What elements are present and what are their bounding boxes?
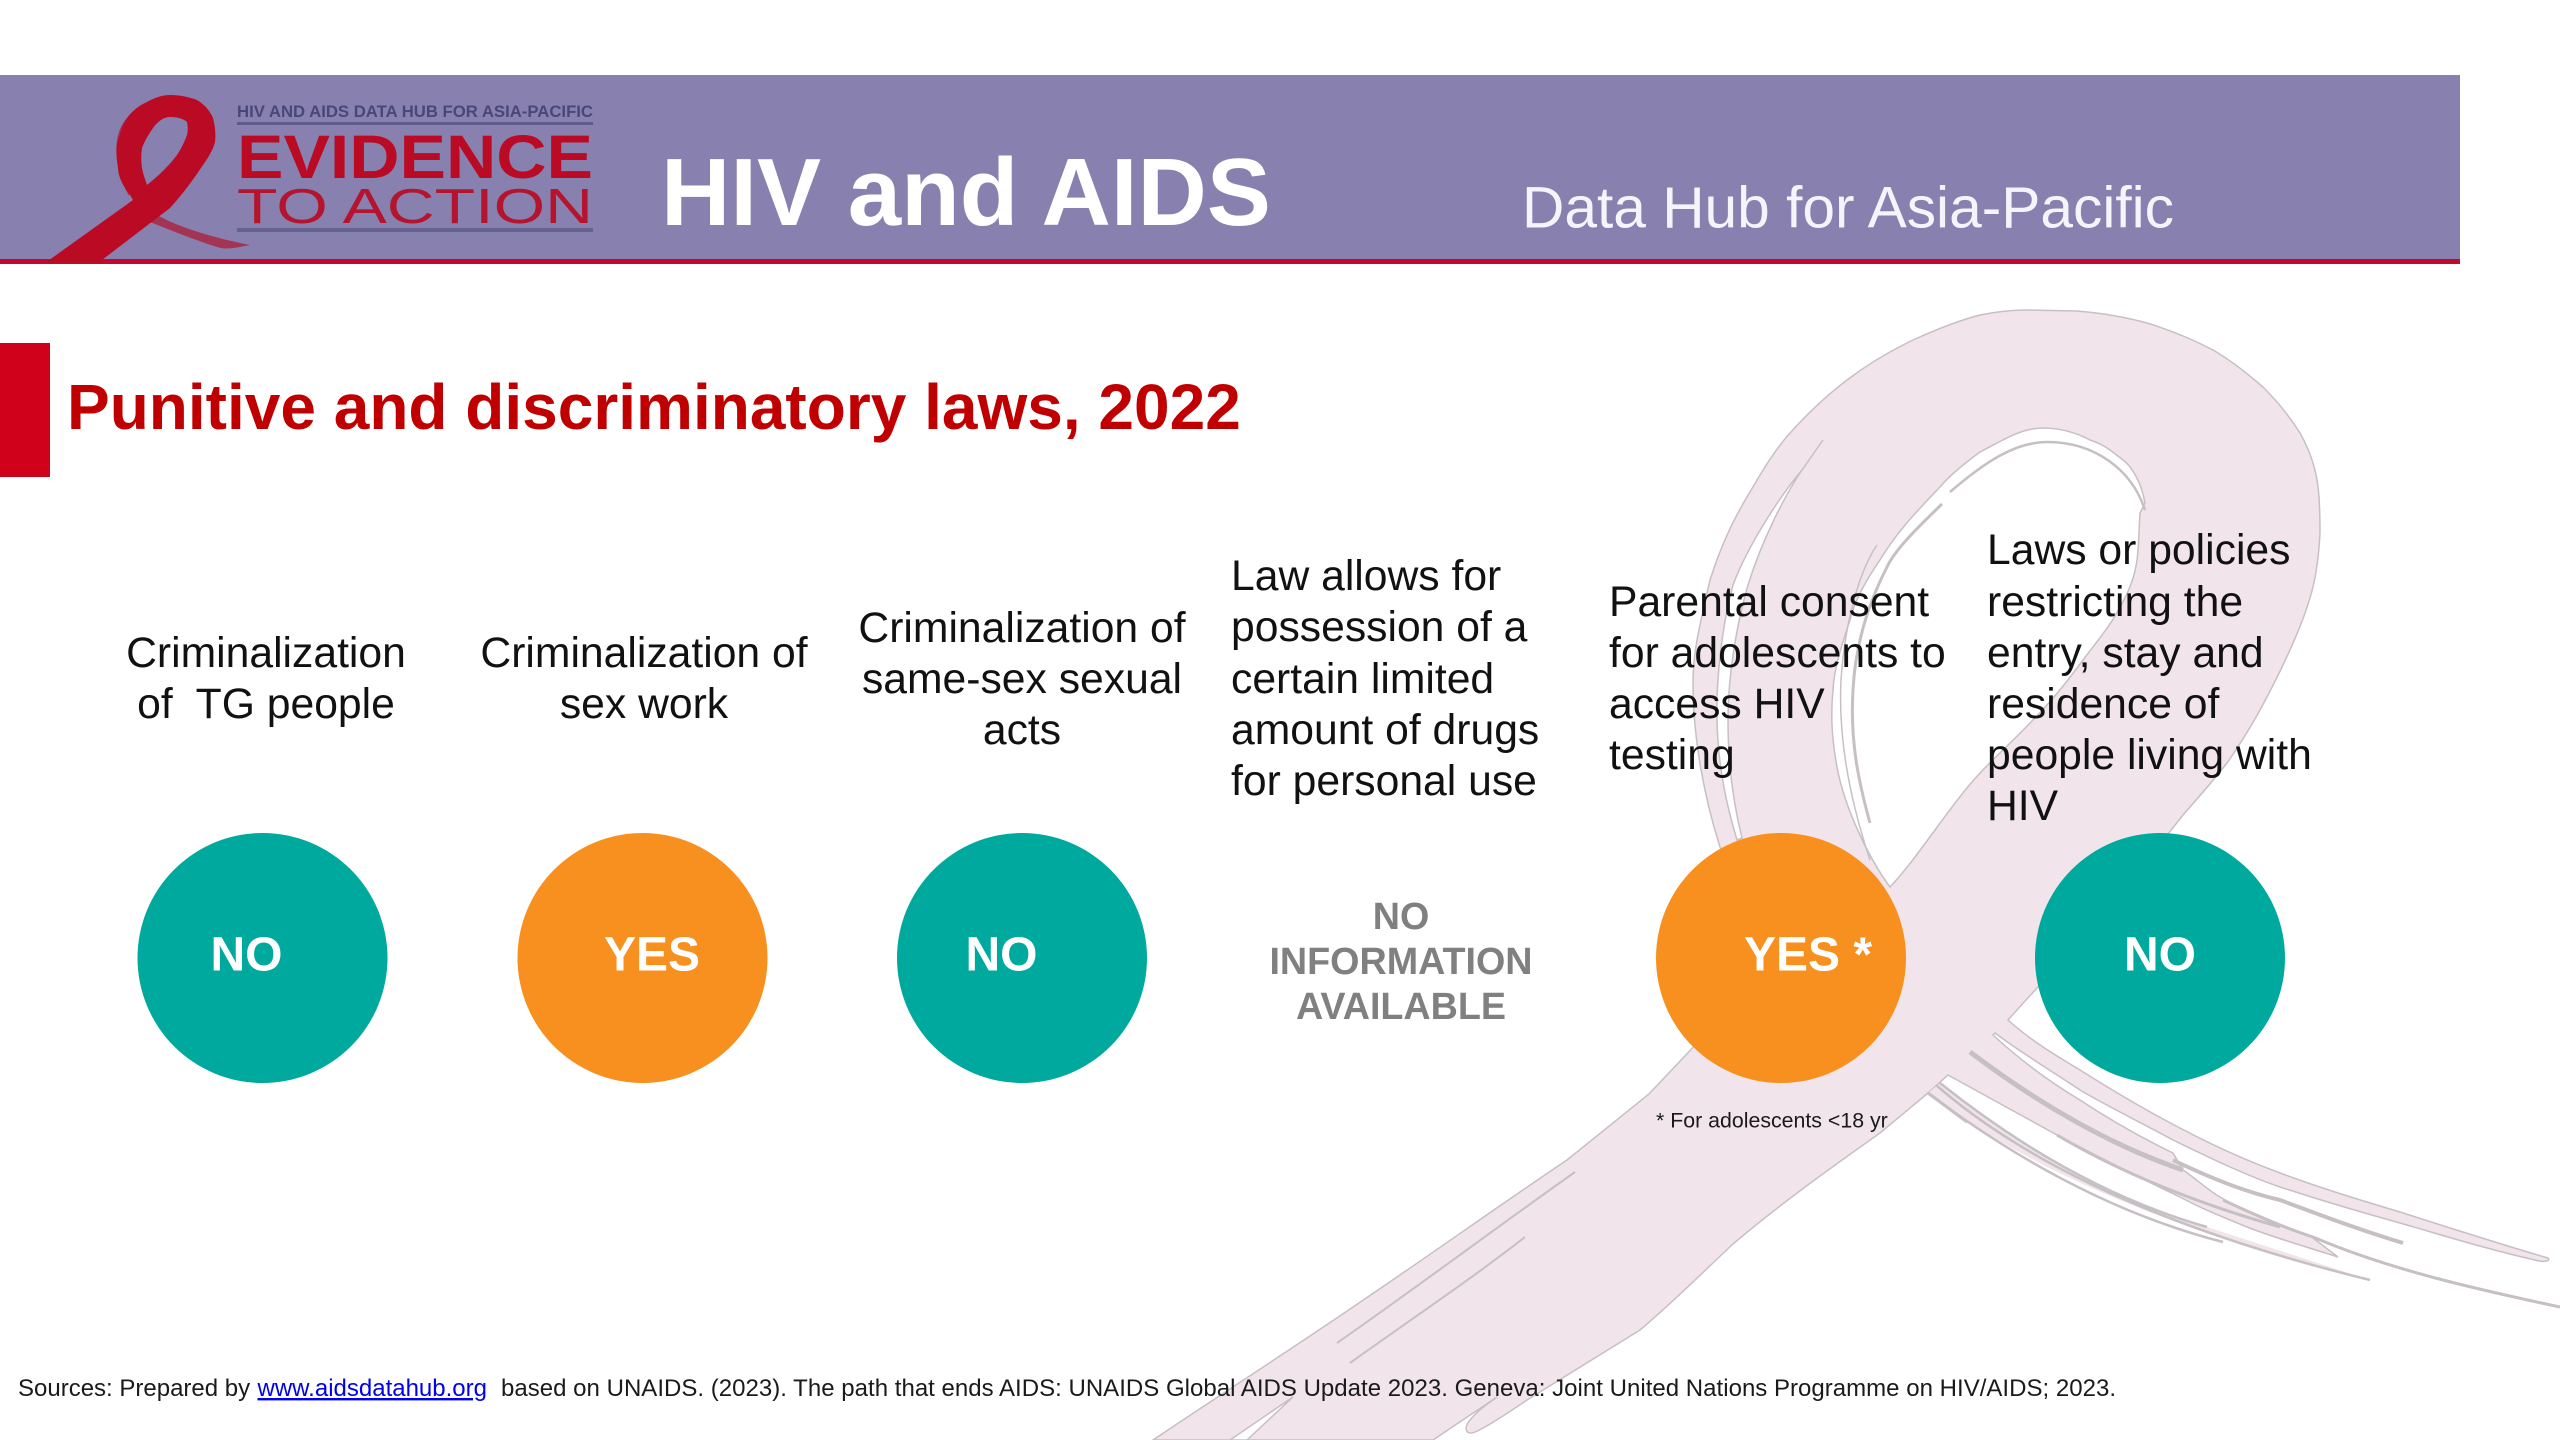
answer: no information available: INFORMATION [1269, 940, 1533, 982]
question text: certain limited [1231, 655, 1494, 703]
answer circle [138, 833, 388, 1083]
answer label: YES * [1744, 928, 1872, 982]
logo: Evidence to Action: TO ACTION [237, 180, 593, 234]
column 3: Criminalization of same-sex sexual acts [858, 604, 1186, 1083]
question text: access HIV [1609, 680, 1825, 728]
question text: Criminalization [126, 629, 406, 677]
answer circle [897, 833, 1147, 1083]
question text: sex work [560, 680, 729, 728]
question text: Criminalization of [480, 629, 808, 677]
answer label: NO [210, 928, 282, 982]
question text: residence of [1987, 680, 2220, 728]
question text: Laws or policies [1987, 526, 2290, 574]
logo: Evidence to Action: EVIDENCE [237, 123, 593, 191]
question text: restricting the [1987, 578, 2243, 626]
header banner [0, 75, 2460, 264]
question text: same-sex sexual [862, 655, 1182, 703]
question text: Criminalization of [858, 604, 1186, 652]
header title: HIV and AIDS [661, 139, 1271, 246]
column 2: Criminalization of sex work [480, 629, 808, 1083]
answer: no information available: AVAILABLE [1296, 985, 1506, 1027]
question text: possession of a [1231, 603, 1528, 651]
logo: Evidence to Action: HIV AND AIDS DATA HUB FOR ASIA-PACIFIC [237, 103, 593, 121]
question text: amount of drugs [1231, 706, 1539, 754]
column 5: Parental consent [1609, 578, 1946, 1132]
sources line: based on UNAIDS. (2023). The path that ends AIDS: UNAIDS Global AIDS Update 2023. Geneva: Joint United Nations Programme on HIV/AIDS; 2023. [501, 1375, 2116, 1402]
header subtitle: Data Hub for Asia-Pacific [1522, 176, 2174, 240]
question text: HIV [1987, 782, 2059, 830]
answer: no information available: NO [1373, 895, 1429, 937]
background ribbon watermark [1153, 310, 2560, 1440]
section marker [0, 343, 50, 477]
logo: Evidence to Action [45, 95, 593, 263]
section title: Punitive and discriminatory laws, 2022 [67, 371, 1241, 443]
answer circle [518, 833, 768, 1083]
question text: people living with [1987, 731, 2312, 779]
answer circle [2035, 833, 2285, 1083]
question text: for personal use [1231, 757, 1537, 805]
footnote: * For adolescents <18 yr [1656, 1108, 1888, 1132]
answer label: YES [604, 928, 700, 982]
question text: acts [983, 706, 1061, 754]
question text: of TG people [137, 680, 395, 728]
question text: for adolescents to [1609, 629, 1946, 677]
sources line: Sources: Prepared by [18, 1375, 250, 1402]
column 1: Criminalization of TG people [126, 629, 406, 1083]
source link: www.aidsdatahub.org [256, 1375, 487, 1402]
answer circle [1656, 833, 1906, 1083]
question text: entry, stay and [1987, 629, 2264, 677]
question text: Law allows for [1231, 552, 1501, 600]
question text: Parental consent [1609, 578, 1929, 626]
question text: testing [1609, 731, 1735, 779]
answer label: NO [966, 928, 1038, 982]
column 4: possession of drugs [1231, 552, 1539, 1027]
column 6: Laws restricting entry [1987, 526, 2312, 1083]
answer label: NO [2124, 928, 2196, 982]
